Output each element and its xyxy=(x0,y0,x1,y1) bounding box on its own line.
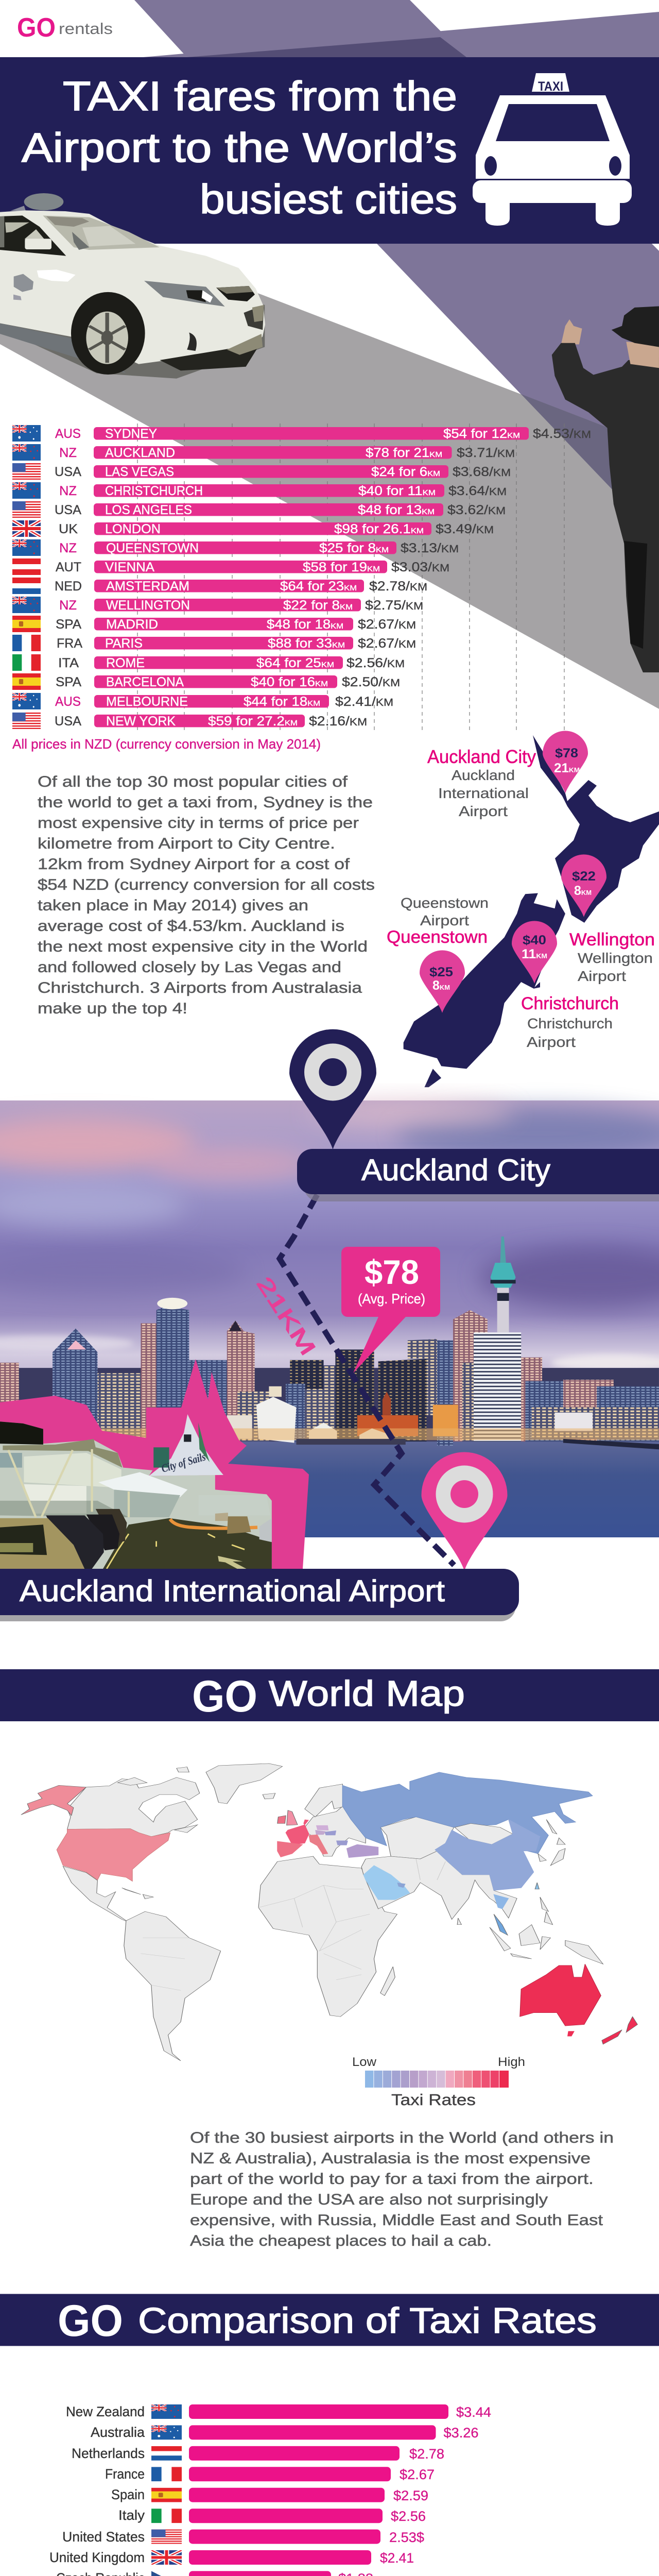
choropleth world map xyxy=(21,1764,637,2061)
note: currency: All prices in NZD (currency conversion in May 2014) xyxy=(12,736,321,752)
row: London xyxy=(12,520,494,537)
chart: grid lines xyxy=(137,423,564,732)
pin: Queenstown: 8KM xyxy=(432,978,450,993)
label: Christchurch: Christchurch xyxy=(527,1015,613,1031)
section header: World Map: World Map xyxy=(269,1673,465,1714)
text block: map commentary xyxy=(190,2129,614,2249)
illustration: white taxi car xyxy=(0,193,265,379)
icon: taxi front view: TAXI xyxy=(538,79,563,94)
row: Spain: $2.59 xyxy=(393,2488,428,2503)
text block: intro paragraph: Of all the top 30 most popular cities of xyxy=(38,773,348,790)
row: Vienna: VIENNA xyxy=(105,560,154,574)
photo: Auckland water xyxy=(0,1442,659,1537)
region: Bulgaria xyxy=(336,1840,348,1845)
row: New York: $59 for 27.2 KM xyxy=(208,714,298,728)
label: Auckland City: Auckland xyxy=(452,767,515,783)
row: Las Vegas: $24 for 6 KM xyxy=(371,465,440,479)
row: Las Vegas: LAS VEGAS xyxy=(105,465,174,479)
row: Vienna: $3.03/ KM xyxy=(391,560,449,574)
row: New York: USA xyxy=(55,714,81,728)
logo: GO rentals xyxy=(17,13,113,43)
label: Wellington: Wellington xyxy=(578,950,653,966)
row: Rome: ITA xyxy=(58,656,79,670)
label: Wellington: Airport xyxy=(578,968,626,984)
label: 21 KM rotated: 21KM xyxy=(252,1272,321,1360)
photo: Auckland skyline buildings xyxy=(0,1298,659,1449)
row: Vienna xyxy=(12,558,449,575)
region: Greenland xyxy=(206,1764,283,1804)
title xyxy=(22,73,457,222)
pin: Christchurch xyxy=(512,921,557,984)
sail xyxy=(149,1414,223,1476)
row: France: $2.67 xyxy=(400,2467,435,2482)
row: Amsterdam: $64 for 23 KM xyxy=(280,579,357,594)
section header: World Map: GO xyxy=(192,1672,257,1721)
row: Paris: PARIS xyxy=(105,636,143,651)
pin: Auckland xyxy=(543,731,588,793)
row: Barcelona: SPA xyxy=(56,675,81,689)
bar chart: price per km by city xyxy=(12,425,591,729)
pin: Wellington: $22 xyxy=(572,869,596,884)
icon: taxi front view xyxy=(473,73,632,226)
region: New Zealand xyxy=(626,2016,637,2032)
label: Wellington: Wellington xyxy=(569,930,655,950)
row: Madrid xyxy=(12,616,416,632)
region: Mongolia xyxy=(455,1823,513,1844)
row: Amsterdam: NED xyxy=(55,579,82,594)
text block: map commentary: part of the world to pay for a taxi from the airport. xyxy=(190,2171,594,2188)
row: Paris: FRA xyxy=(57,636,82,651)
text: City of Sails: City of Sails xyxy=(160,1450,207,1475)
label: Christchurch: Christchurch xyxy=(521,994,619,1013)
row: Australia xyxy=(91,2425,479,2441)
title: busiest cities xyxy=(200,176,457,222)
row: Paris: $88 for 33 KM xyxy=(268,636,345,651)
row: Vienna: AUT xyxy=(56,560,81,574)
row: Amsterdam: AMSTERDAM xyxy=(106,579,189,594)
row: New York: NEW YORK xyxy=(106,714,176,728)
region: Australia xyxy=(520,1964,601,2026)
header background: purple diagonal bands xyxy=(134,0,659,538)
row: New Zealand: New Zealand xyxy=(66,2404,145,2419)
row: Christchurch: CHRISTCHURCH xyxy=(105,484,203,498)
region: Turkey xyxy=(346,1844,378,1858)
row: Auckland: NZ xyxy=(59,446,77,460)
row: Christchurch: $3.64/ KM xyxy=(448,484,507,498)
row: Czech Republic xyxy=(56,2570,373,2576)
row: Auckland: $3.71/ KM xyxy=(457,446,515,460)
label: Queenstown: Queenstown xyxy=(387,927,488,947)
label: Auckland City xyxy=(427,746,536,819)
row: Queenstown: $25 for 8 KM xyxy=(319,541,389,555)
label: Auckland City: International xyxy=(438,785,529,801)
text block: intro paragraph: $54 NZD (currency conversion for all costs xyxy=(38,876,375,893)
terminal building xyxy=(0,1421,272,1569)
row: Sydney: $54 for 12 KM xyxy=(443,427,520,441)
pin: Auckland City navy xyxy=(289,1029,376,1149)
section header: Comparison of Taxi Rates xyxy=(0,2294,659,2346)
region: China xyxy=(435,1820,540,1890)
row: Wellington xyxy=(12,597,423,613)
row: Madrid: MADRID xyxy=(106,617,158,632)
row: Sydney: SYDNEY xyxy=(105,427,157,441)
row: United States: 2.53$ xyxy=(389,2530,424,2545)
photo: Sky Tower xyxy=(491,1236,516,1332)
text block: intro paragraph xyxy=(38,773,375,1017)
row: Queenstown: QUEENSTOWN xyxy=(106,541,199,555)
section header: World Map xyxy=(0,1669,659,1721)
banner: Auckland City xyxy=(297,1149,659,1201)
banner: Auckland International Airport: Auckland International Airport xyxy=(20,1574,445,1608)
region: Russia xyxy=(342,1772,593,1854)
label: Christchurch xyxy=(521,994,619,1050)
road xyxy=(103,1518,272,1569)
section header: Comparison of Taxi Rates: GO xyxy=(58,2296,123,2346)
grey road band xyxy=(0,247,659,709)
pin: Christchurch: 11KM xyxy=(522,947,547,961)
pin: Christchurch: $40 xyxy=(523,933,546,947)
pin: Wellington: 8KM xyxy=(574,884,592,898)
row: Madrid: $48 for 18 KM xyxy=(267,617,343,632)
text block: map commentary: Europe and the USA are also not surprisingly xyxy=(190,2191,548,2208)
region: USA xyxy=(57,1828,170,1882)
text block: intro paragraph: 12km from Sydney Airport for a cost of xyxy=(38,856,350,873)
row: Melbourne: $44 for 18 KM xyxy=(244,694,320,709)
section header: Comparison of Taxi Rates: Comparison of Taxi Rates xyxy=(138,2300,597,2341)
text block: map commentary: Of the 30 busiest airports in the World (and others in xyxy=(190,2129,614,2146)
legend: taxi rates: Low xyxy=(352,2055,377,2069)
photo: Auckland skyline sky xyxy=(0,1099,659,1371)
row: United States: United States xyxy=(62,2529,145,2545)
row: Christchurch: $40 for 11 KM xyxy=(358,484,436,498)
parked cars xyxy=(96,1509,127,1543)
pin: Wellington xyxy=(561,855,606,917)
row: Spain xyxy=(111,2487,428,2503)
row: Queenstown xyxy=(12,539,459,556)
illustration: man hailing a taxi xyxy=(552,306,659,672)
row: Vienna: $58 for 19 KM xyxy=(303,560,380,574)
region: Africa xyxy=(258,1856,397,2016)
row: Italy: $2.56 xyxy=(391,2509,426,2524)
row: Netherlands: $2.78 xyxy=(409,2446,444,2462)
row: France: France xyxy=(105,2466,145,2482)
row: New Zealand: $3.44 xyxy=(456,2404,491,2420)
row: Las Vegas xyxy=(12,463,511,480)
row: Los Angeles: $3.62/ KM xyxy=(447,503,506,517)
row: Los Angeles xyxy=(12,501,506,518)
region: Spain xyxy=(278,1841,303,1857)
region: France xyxy=(286,1825,309,1844)
row: Paris: $2.67/ KM xyxy=(358,636,416,651)
pin: Auckland: $78 xyxy=(555,746,578,760)
row: New York: $2.16/ KM xyxy=(309,714,367,728)
text block: map commentary: NZ & Australia), Australasia is the most expensive xyxy=(190,2150,591,2167)
row: Italy: Italy xyxy=(118,2507,145,2523)
dashed route line xyxy=(280,1195,454,1565)
row: Barcelona xyxy=(12,673,400,690)
row: Rome: ROME xyxy=(106,656,145,670)
row: London: $98 for 26.1 KM xyxy=(334,522,424,536)
row: United Kingdom xyxy=(49,2550,414,2566)
row: Amsterdam: $2.78/ KM xyxy=(369,579,427,594)
row: Netherlands: Netherlands xyxy=(72,2446,145,2461)
row: Auckland: AUCKLAND xyxy=(105,446,175,460)
legend: taxi rates: Taxi Rates xyxy=(391,2091,476,2109)
bar chart: country comparison xyxy=(16,2404,491,2576)
region: Italy xyxy=(309,1835,328,1854)
row: New Zealand xyxy=(66,2404,491,2420)
region: Canada xyxy=(67,1777,200,1837)
row: Madrid: SPA xyxy=(56,617,81,632)
region: Europe and Scandinavia xyxy=(305,1806,366,1856)
row: Rome xyxy=(12,654,405,671)
text block: intro paragraph: most expensive city in terms of price per xyxy=(38,815,359,832)
row: Paris xyxy=(12,635,416,651)
photo: Auckland airport collage xyxy=(0,1359,309,1569)
row: New York xyxy=(12,713,367,729)
row: Los Angeles: USA xyxy=(55,503,81,517)
region: Central Asia xyxy=(380,1817,454,1859)
logo: GO rentals: rentals xyxy=(59,20,113,38)
row: France xyxy=(105,2466,435,2482)
logo: GO rentals: GO xyxy=(17,13,56,43)
label: Queenstown xyxy=(387,895,489,947)
region: Southeast Asia islands xyxy=(490,1927,511,1951)
text block: intro paragraph: and followed closely by Las Vegas and xyxy=(38,959,341,976)
legend: taxi rates: High xyxy=(498,2055,525,2069)
row: Auckland: $78 for 21 KM xyxy=(366,446,442,460)
row: Italy xyxy=(118,2507,426,2524)
map: New Zealand xyxy=(404,731,659,1087)
callout: average price xyxy=(341,1247,440,1373)
row: Spain: Spain xyxy=(111,2487,145,2502)
text block: intro paragraph: make up the top 4! xyxy=(38,1000,187,1017)
row: United Kingdom: $2.41 xyxy=(380,2550,414,2566)
row: Las Vegas: USA xyxy=(55,465,81,479)
banner: Auckland International Airport xyxy=(0,1569,519,1621)
row: Rome: $2.56/ KM xyxy=(346,656,405,670)
pin: Auckland: 21KM xyxy=(554,761,580,775)
row: Sydney xyxy=(12,425,591,442)
row: Barcelona: $2.50/ KM xyxy=(342,675,400,689)
row: Amsterdam xyxy=(12,578,427,594)
row: Melbourne xyxy=(12,693,393,709)
region: Alaska xyxy=(21,1785,86,1816)
pin: Queenstown: $25 xyxy=(429,965,453,979)
row: Barcelona: $40 for 16 KM xyxy=(251,675,328,689)
title banner xyxy=(0,57,659,244)
row: Netherlands xyxy=(72,2446,444,2462)
row: Las Vegas: $3.68/ KM xyxy=(453,465,511,479)
row: Los Angeles: LOS ANGELES xyxy=(105,503,192,517)
region: Thailand and Malaysia xyxy=(494,1894,509,1909)
label: Wellington xyxy=(569,930,655,984)
text block: intro paragraph: the world to get a taxi from, Sydney is the xyxy=(38,794,373,811)
row: London: $3.49/ KM xyxy=(436,522,494,536)
row: Auckland xyxy=(12,444,515,461)
row: Madrid: $2.67/ KM xyxy=(358,617,416,632)
banner: Auckland City: Auckland City xyxy=(361,1154,550,1187)
row: Queenstown: $3.13/ KM xyxy=(401,541,459,555)
label: Queenstown: Queenstown xyxy=(401,895,489,911)
row: Melbourne: $2.41/ KM xyxy=(335,694,393,709)
text block: intro paragraph: taken place in May 2014) gives an xyxy=(38,897,308,914)
legend: taxi rates xyxy=(352,2055,525,2109)
row: Melbourne: MELBOURNE xyxy=(106,694,188,709)
pin: Queenstown xyxy=(420,951,465,1013)
row: Rome: $64 for 25 KM xyxy=(256,656,334,670)
region: Hungary and Austria xyxy=(324,1831,336,1835)
row: Wellington: $22 for 8 KM xyxy=(283,598,353,613)
row: Wellington: NZ xyxy=(59,598,77,613)
row: United Kingdom: United Kingdom xyxy=(49,2550,145,2565)
row: London: UK xyxy=(59,522,78,536)
pin: Airport pink xyxy=(421,1452,508,1571)
region: Saudi Arabia xyxy=(363,1866,410,1900)
row: Wellington: $2.75/ KM xyxy=(365,598,423,613)
text block: intro paragraph: average cost of $4.53/km. Auckland is xyxy=(38,918,344,935)
text block: intro paragraph: the next most expensive city in the World xyxy=(38,938,368,955)
row: Australia: $3.26 xyxy=(444,2425,479,2441)
row: Christchurch xyxy=(12,482,507,499)
row: Sydney: AUS xyxy=(55,427,81,441)
callout: average price: $78 xyxy=(365,1253,419,1291)
row: United States xyxy=(62,2529,424,2545)
pink splash xyxy=(0,1359,309,1569)
region: UK and Ireland xyxy=(287,1810,298,1825)
text block: map commentary: Asia the cheapest places to hail a cab. xyxy=(190,2232,492,2249)
title: TAXI fares from the xyxy=(63,73,457,119)
label: Christchurch: Airport xyxy=(527,1034,576,1050)
row: Christchurch: NZ xyxy=(59,484,77,498)
row: Los Angeles: $48 for 13 KM xyxy=(358,503,435,517)
region: Japan and Korea xyxy=(550,1849,565,1866)
callout: average price: (Avg. Price) xyxy=(358,1291,425,1307)
row: Barcelona: BARCELONA xyxy=(106,675,184,689)
row: London: LONDON xyxy=(105,522,161,536)
label: Auckland City: Auckland City xyxy=(427,746,536,767)
title: Airport to the World’s xyxy=(22,125,457,171)
row: Wellington: WELLINGTON xyxy=(106,598,190,613)
region: South America xyxy=(124,1911,221,2061)
row: Sydney: $4.53/ KM xyxy=(533,427,591,441)
row: Queenstown: NZ xyxy=(59,541,77,555)
row: Melbourne: AUS xyxy=(55,694,81,709)
text block: map commentary: expensive, with Russia, Middle East and South East xyxy=(190,2212,603,2229)
text block: intro paragraph: kilometre from Airport to City Centre. xyxy=(38,835,335,852)
label: Auckland City: Airport xyxy=(459,803,508,819)
row: Australia: Australia xyxy=(91,2425,145,2440)
region: Mexico and Central America xyxy=(63,1866,128,1922)
text block: intro paragraph: Christchurch. 3 Airports from Australasia xyxy=(38,979,362,996)
label: Queenstown: Airport xyxy=(420,912,469,928)
region: Middle East and India xyxy=(361,1851,517,1920)
